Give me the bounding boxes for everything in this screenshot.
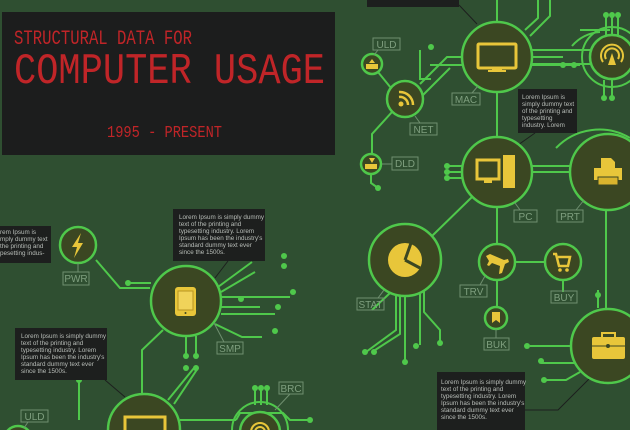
text box: left note: Ipsum has been the industry's bbox=[21, 354, 104, 361]
text box: left note: since the 1500s. bbox=[21, 368, 67, 375]
labels: PC bbox=[519, 212, 532, 223]
node: TRV bbox=[479, 244, 515, 280]
text box: left note: standard dummy text ever bbox=[21, 361, 94, 368]
node: briefcase bbox=[571, 309, 630, 383]
node: PRT bbox=[570, 134, 630, 210]
labels: ULD bbox=[24, 412, 45, 423]
text box: bottom right note: Ipsum has been the industry's bbox=[441, 400, 524, 407]
node: BUK bbox=[485, 307, 507, 329]
text box: left note: Lorem Ipsum is simply dummy bbox=[21, 333, 107, 340]
text box: MAC note: industry. Lorem bbox=[522, 122, 565, 129]
node: PC bbox=[462, 137, 532, 207]
node: ULD top bbox=[362, 54, 382, 74]
node: DLD bbox=[361, 154, 381, 174]
node: MAC bbox=[462, 22, 532, 92]
labels: DLD bbox=[395, 159, 415, 170]
text box: bottom right note: standard dummy text ever bbox=[441, 407, 514, 414]
text box: SMP note: text of the printing and bbox=[179, 221, 242, 228]
text box: left note bbox=[15, 328, 125, 397]
text box: SMP note: since the 1500s. bbox=[179, 249, 225, 256]
labels: NET bbox=[414, 125, 434, 136]
labels: ULD bbox=[376, 40, 397, 51]
node: BRC bbox=[232, 402, 288, 430]
text box: MAC note: typesetting bbox=[522, 115, 553, 122]
text box: SMP note bbox=[173, 209, 265, 278]
labels: STAT bbox=[358, 300, 383, 311]
labels: PRT bbox=[560, 212, 580, 223]
text box: PWR note bbox=[0, 226, 51, 263]
text box: bottom right note: Lorem Ipsum is simply dummy bbox=[441, 379, 527, 386]
text box: bottom right note: since the 1500s. bbox=[441, 414, 487, 421]
text box: bottom right note: text of the printing and bbox=[441, 386, 504, 393]
node: ULD bottom bbox=[4, 426, 32, 430]
text box: left note: typesetting industry. Lorem bbox=[21, 347, 96, 354]
text box: top bbox=[367, 0, 477, 24]
text box: MAC note: of the printing and bbox=[522, 108, 573, 115]
text box: PWR note: the printing and bbox=[0, 243, 44, 250]
text box: SMP note: Ipsum has been the industry's bbox=[179, 235, 262, 242]
node: broadcast bbox=[582, 27, 630, 87]
title box: STRUCTURAL DATA FOR bbox=[14, 28, 192, 51]
title box: COMPUTER USAGE bbox=[14, 47, 325, 97]
node: NET bbox=[387, 81, 423, 117]
title box bbox=[2, 12, 335, 155]
text box: SMP note: Lorem Ipsum is simply dummy bbox=[179, 214, 265, 221]
text box: PWR note: rem Ipsum is bbox=[0, 229, 36, 236]
labels: BUK bbox=[486, 340, 507, 351]
title box: 1995 - PRESENT bbox=[107, 124, 222, 143]
node: SMP bbox=[151, 266, 221, 336]
text box: bottom right note: typesetting industry. Lorem bbox=[441, 393, 516, 400]
text box: PWR note: mply dummy text bbox=[0, 236, 48, 243]
text box: MAC note bbox=[518, 89, 577, 145]
node: bottom computer bbox=[108, 394, 180, 430]
text box: MAC note: Lorem Ipsum is bbox=[522, 94, 565, 101]
node: BUY bbox=[545, 244, 581, 280]
text box: SMP note: typesetting industry. Lorem bbox=[179, 228, 254, 235]
text box: MAC note: simply dummy text bbox=[522, 101, 574, 108]
labels: BRC bbox=[280, 384, 302, 395]
labels: SMP bbox=[219, 344, 241, 355]
labels: PWR bbox=[64, 274, 88, 285]
text box: bottom right note bbox=[437, 372, 590, 430]
text box: left note: text of the printing and bbox=[21, 340, 84, 347]
text box: SMP note: standard dummy text ever bbox=[179, 242, 252, 249]
labels: TRV bbox=[464, 287, 484, 298]
node: STAT bbox=[369, 224, 441, 296]
labels: MAC bbox=[455, 95, 477, 106]
node: PWR bbox=[60, 227, 96, 263]
text box: PWR note: pesetting indus- bbox=[0, 250, 44, 257]
labels: BUY bbox=[554, 293, 575, 304]
